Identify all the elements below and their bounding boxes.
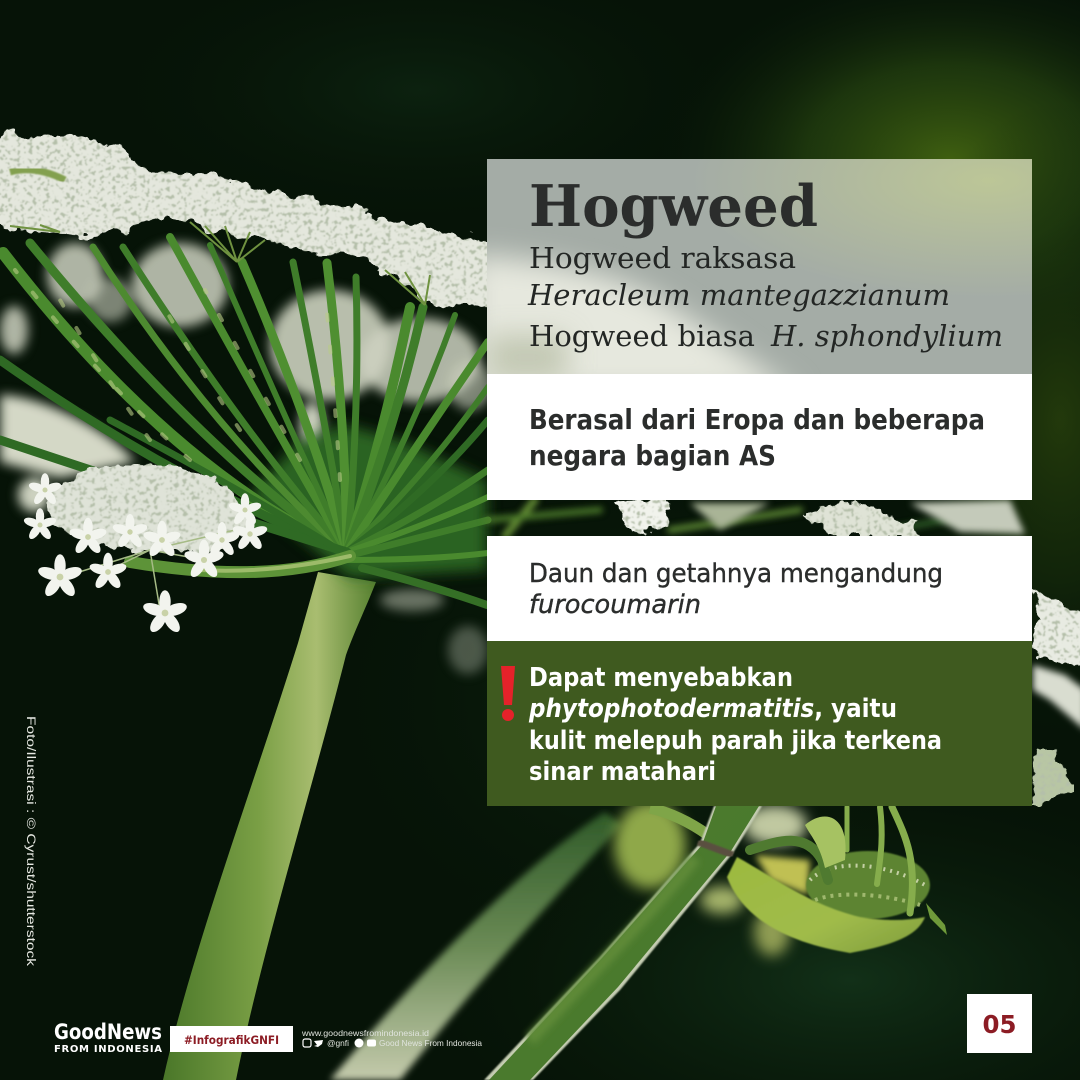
subtitle: common hogweed: Hogweed biasa H. sphondylium <box>529 319 1003 353</box>
main stem <box>163 572 376 1080</box>
right side flowers behind panels <box>487 500 1080 806</box>
panel: warning: Dapat menyebabkan <box>529 663 793 693</box>
panel: contains furocoumarin: Daun dan getahnya mengandung <box>529 559 943 589</box>
hashtag tag: #InfografikGNFI <box>184 1033 279 1047</box>
contact details: @gnfi <box>327 1038 349 1048</box>
umbellet undersides <box>10 170 430 305</box>
panel: origin: negara bagian AS <box>529 439 776 472</box>
panel: origin: Berasal dari Eropa dan beberapa <box>529 403 985 436</box>
heading: Hogweed <box>529 173 818 240</box>
plant: hogweed flower umbel and stem <box>0 135 495 1080</box>
stem <box>484 806 762 1080</box>
contact details: www.goodnewsfromindonesia.id <box>301 1028 429 1038</box>
page number <box>967 994 1032 1053</box>
logo: GoodNews from Indonesia: FROM INDONESIA <box>54 1044 162 1055</box>
umbel rays <box>0 237 488 605</box>
panel: title <box>487 159 1032 374</box>
social icons <box>303 1038 376 1048</box>
flower canopy <box>0 135 495 307</box>
small flower cluster <box>23 464 269 635</box>
logo: GoodNews from Indonesia <box>54 1020 162 1055</box>
panel: contains furocoumarin: furocoumarin <box>529 590 701 620</box>
page number: 05 <box>982 1010 1016 1039</box>
distant blurred flowers <box>0 243 492 674</box>
panel: warning: phytophotodermatitis, yaitu <box>529 694 908 724</box>
logo: GoodNews from Indonesia: GoodNews <box>54 1020 162 1044</box>
contact details: Good News From Indonesia <box>379 1038 482 1048</box>
latin name: Heracleum mantegazzianum <box>527 278 950 312</box>
subtitle: giant hogweed: Hogweed raksasa <box>529 241 796 275</box>
ray highlights <box>15 270 340 480</box>
panel: warning: kulit melepuh parah jika terkena <box>529 726 942 756</box>
flower stem and bud <box>484 801 947 1080</box>
panel: warning: sinar matahari <box>529 757 716 787</box>
icon: exclamation mark <box>501 666 515 721</box>
photo credit: Foto/Ilustrasi : © Cyrust/shutterstock <box>24 716 36 966</box>
ray hub <box>250 425 487 578</box>
panel: warning <box>487 641 1032 806</box>
blurred background stem <box>330 812 622 1080</box>
contact details <box>301 1028 482 1048</box>
bud <box>755 855 810 895</box>
hashtag tag <box>170 1026 293 1052</box>
panel: origin <box>487 374 1032 500</box>
panel: contains furocoumarin <box>487 536 1032 641</box>
